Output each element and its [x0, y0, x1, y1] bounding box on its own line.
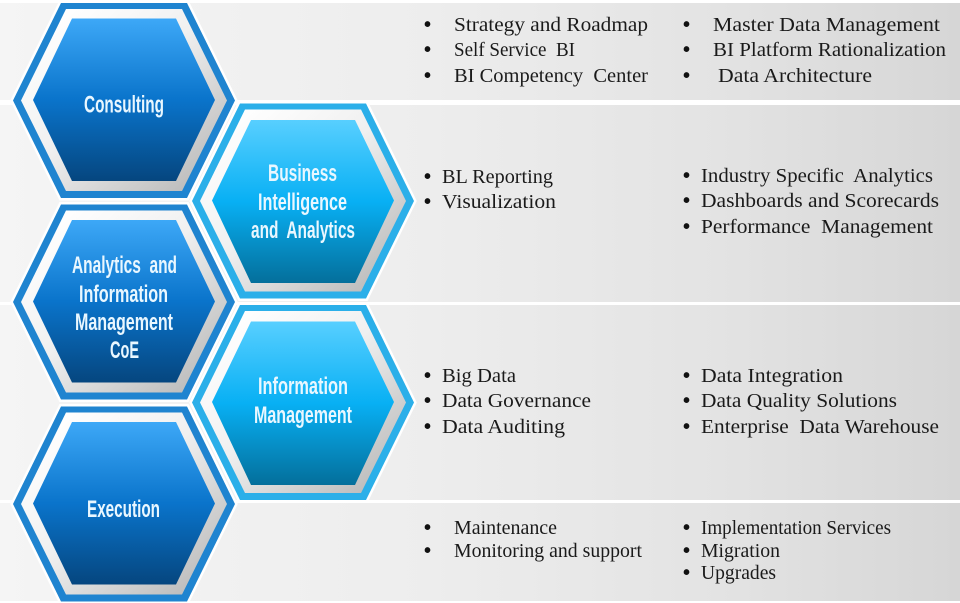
text block: execution right list: Implementation Services — [701, 517, 891, 539]
text block: consulting right list: Data Architecture — [718, 65, 872, 87]
text block: information management right list: Data Quality Solutions — [701, 390, 897, 412]
hexagon: analytics and information management CoE: Information — [79, 281, 168, 308]
text block: consulting left list: • — [424, 14, 431, 36]
text block: business intelligence left list: • — [424, 166, 431, 188]
panel: information management band — [0, 305, 960, 500]
text block: execution left list: • — [424, 540, 431, 562]
hexagon: analytics and information management CoE: CoE — [110, 337, 139, 364]
text block: information management right list: • — [683, 365, 690, 387]
text block: information management right list: • — [683, 416, 690, 438]
text block: execution right list: • — [683, 517, 690, 539]
hexagon: consulting: Consulting — [84, 92, 164, 118]
text block: information management left list: • — [424, 416, 431, 438]
text block: consulting right list: • — [683, 65, 690, 87]
hexagon: consulting — [13, 3, 235, 198]
text block: execution right list: Upgrades — [701, 562, 776, 584]
text block: execution left list: Monitoring and support — [454, 540, 642, 562]
hexagon: information management: Information — [258, 373, 348, 400]
text block: business intelligence right list: • — [683, 165, 690, 187]
text block: consulting right list — [683, 14, 946, 87]
text block: information management right list: • — [683, 390, 690, 412]
hexagon: execution — [13, 406, 235, 602]
text block: consulting left list: • — [424, 39, 431, 61]
panel: execution band — [0, 503, 960, 601]
text block: information management left list: • — [424, 365, 431, 387]
text block: information management left list: • — [424, 390, 431, 412]
text block: information management left list: Data Governance — [442, 390, 591, 412]
text block: consulting right list: • — [683, 14, 690, 36]
text block: business intelligence left list: BL Reporting — [442, 166, 553, 188]
text block: information management right list: Data Integration — [701, 365, 843, 387]
text block: execution right list: Migration — [701, 540, 780, 562]
text block: execution right list: • — [683, 540, 690, 562]
text block: consulting left list: BI Competency Center — [454, 65, 648, 87]
text block: business intelligence left list: Visualization — [442, 191, 556, 213]
hexagon: execution: Execution — [87, 496, 160, 523]
panel: consulting band — [0, 3, 960, 100]
text block: business intelligence right list — [683, 165, 939, 238]
text block: consulting right list: • — [683, 39, 690, 61]
text block: business intelligence right list: Dashboards and Scorecards — [701, 190, 939, 212]
text block: execution right list — [683, 517, 891, 584]
text block: execution left list: Maintenance — [454, 517, 557, 539]
text block: information management right list — [683, 365, 939, 438]
panel: business intelligence band — [0, 105, 960, 302]
text block: business intelligence right list: Industry Specific Analytics — [701, 165, 933, 187]
hexagon: business intelligence and analytics: and Analytics — [251, 217, 355, 244]
hexagon: business intelligence and analytics — [192, 104, 414, 298]
text block: consulting left list: • — [424, 65, 431, 87]
text block: consulting right list: Master Data Management — [713, 14, 940, 36]
text block: information management left list — [424, 365, 591, 438]
text block: business intelligence right list: Performance Management — [701, 216, 933, 238]
text block: business intelligence left list — [424, 166, 556, 213]
hexagon: analytics and information management CoE: Management — [75, 309, 173, 336]
text block: consulting right list: BI Platform Rationalization — [713, 39, 946, 61]
text block: business intelligence right list: • — [683, 216, 690, 238]
text block: consulting left list: Strategy and Roadmap — [454, 14, 648, 36]
hexagon: business intelligence and analytics: Business — [268, 160, 337, 187]
text block: execution right list: • — [683, 562, 690, 584]
text block: consulting left list: Self Service BI — [454, 39, 575, 61]
hexagon: information management — [192, 305, 414, 500]
text block: information management left list: Data Auditing — [442, 416, 565, 438]
text block: execution left list: • — [424, 517, 431, 539]
hexagon: analytics and information management CoE — [13, 204, 235, 400]
text block: execution left list — [424, 517, 642, 562]
text block: business intelligence right list: • — [683, 190, 690, 212]
hexagon: business intelligence and analytics: Intelligence — [258, 189, 347, 216]
text block: information management left list: Big Data — [442, 365, 516, 387]
text block: consulting left list — [424, 14, 648, 87]
hexagon: analytics and information management CoE: Analytics and — [72, 252, 177, 279]
hexagon: information management: Management — [254, 402, 352, 429]
text block: information management right list: Enterprise Data Warehouse — [701, 416, 939, 438]
text block: business intelligence left list: • — [424, 191, 431, 213]
